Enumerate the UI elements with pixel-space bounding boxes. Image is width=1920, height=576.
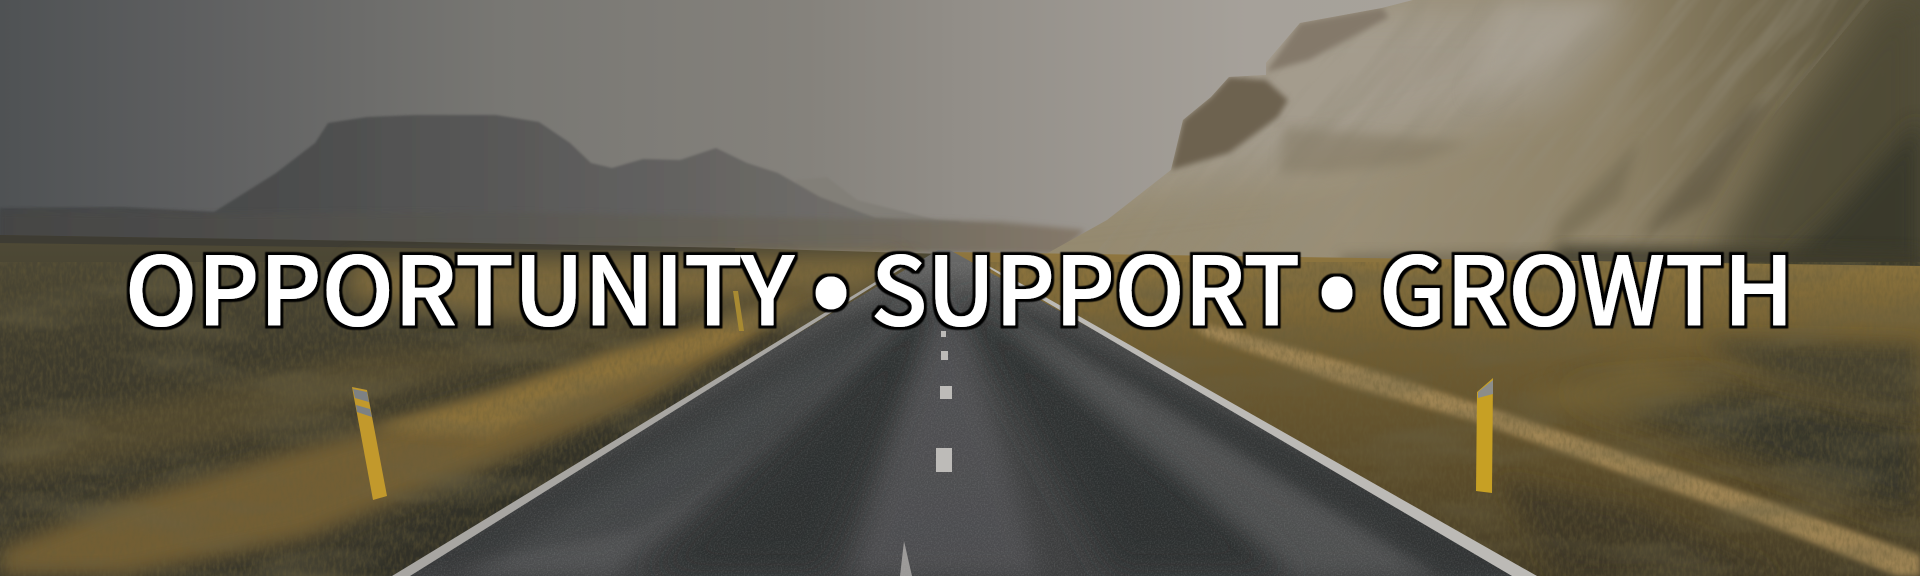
right mountain (1048, 0, 1920, 266)
right grass field (950, 252, 1920, 576)
road edge lines (392, 262, 1537, 576)
grass track on the right (1190, 322, 1920, 576)
title: OPPORTUNITY (125, 217, 795, 353)
icon: distant yellow road post (733, 291, 744, 331)
title: • (811, 197, 851, 359)
sky (0, 0, 1920, 270)
road (392, 250, 1540, 576)
grass texture (0, 262, 1920, 576)
icon: left yellow road post (352, 387, 387, 500)
distant left mountains (0, 115, 1085, 254)
left grass field (0, 235, 945, 576)
title: • (1317, 197, 1357, 359)
title: GROWTH (1379, 217, 1794, 353)
title: SUPPORT (871, 217, 1300, 353)
title (125, 197, 1794, 359)
icon: right yellow road post (1476, 378, 1493, 493)
road centre dashes (900, 331, 952, 576)
